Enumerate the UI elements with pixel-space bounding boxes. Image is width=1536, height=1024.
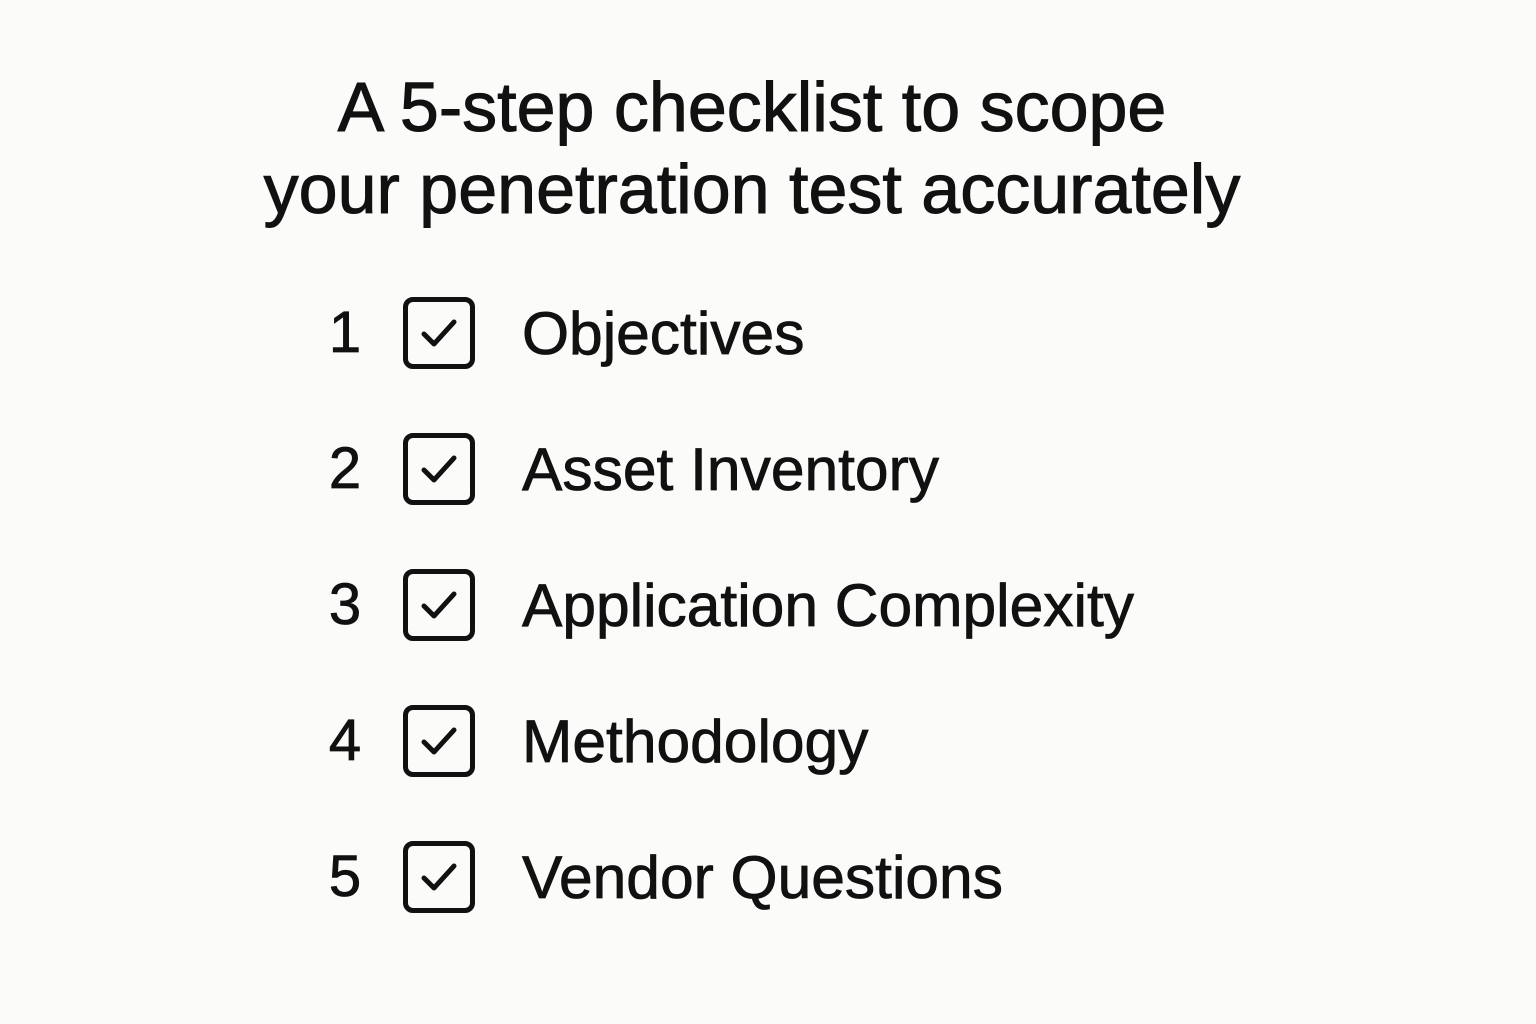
item 2: Asset Inventory: Asset Inventory: [522, 435, 939, 503]
title: your penetration test accurately: [264, 150, 1240, 228]
item 2: Asset Inventory: 2: [329, 436, 361, 501]
item 5: Vendor Questions: 5: [329, 844, 361, 909]
item 1: Objectives: [329, 297, 804, 369]
title: [263, 68, 1241, 228]
icon: checkbox 2: [403, 433, 475, 505]
title: A 5-step checklist to scope: [338, 68, 1166, 146]
item 1: Objectives: 1: [329, 300, 361, 365]
item 5: Vendor Questions: [329, 841, 1003, 913]
icon: checkbox 5: [403, 841, 475, 913]
item 1: Objectives: Objectives: [522, 299, 804, 367]
icon: checkbox 4: [403, 705, 475, 777]
item 5: Vendor Questions: Vendor Questions: [522, 843, 1003, 911]
item 4: Methodology: 4: [329, 708, 361, 773]
icon: checkbox 3: [403, 569, 475, 641]
item 3: Application Complexity: Application Complexity: [522, 571, 1134, 639]
item 3: Application Complexity: 3: [329, 572, 361, 637]
item 2: Asset Inventory: [329, 433, 940, 505]
icon: checkbox 1: [403, 297, 475, 369]
item 4: Methodology: Methodology: [522, 707, 868, 775]
item 4: Methodology: [329, 705, 869, 777]
